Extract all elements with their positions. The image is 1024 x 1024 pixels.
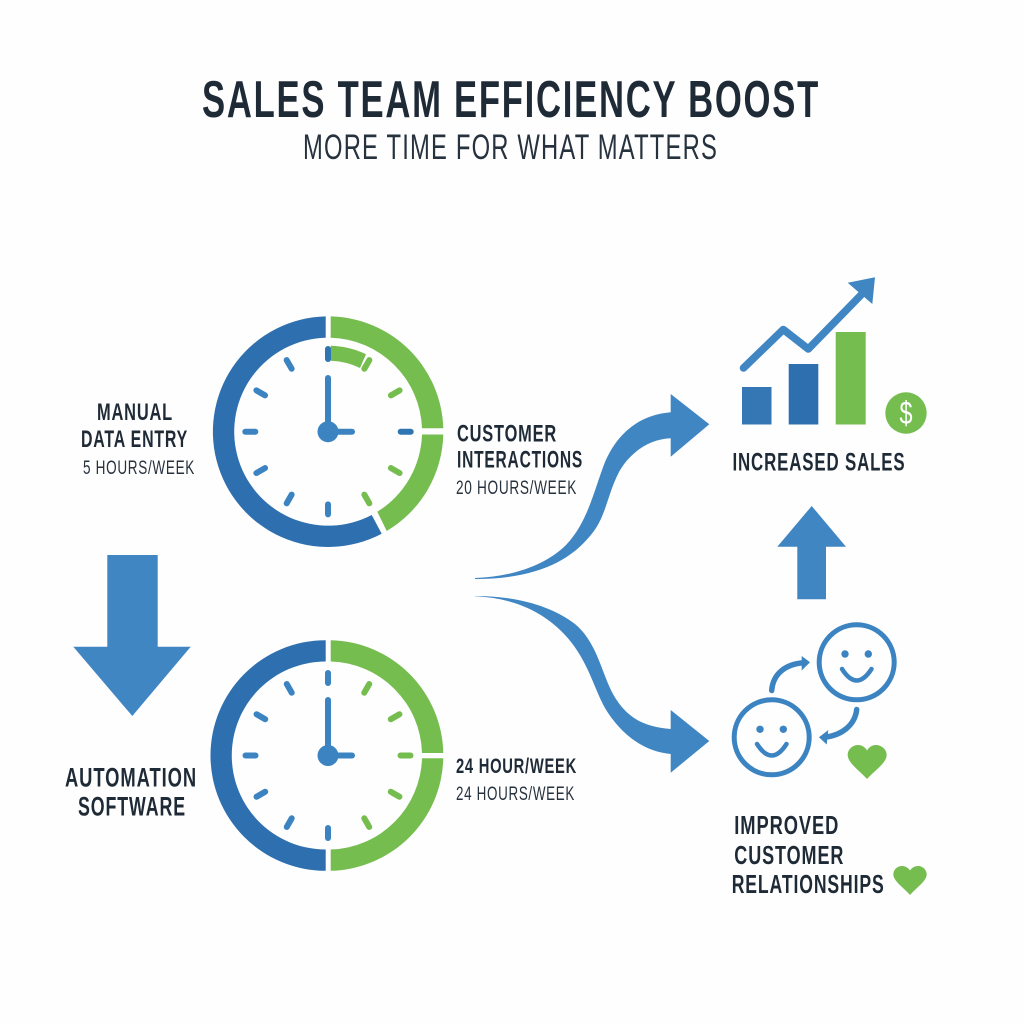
label: automation software: SOFTWARE [78,792,186,822]
arrow: up to increased sales [777,506,846,599]
label: improved customer relationships: IMPROVED [734,810,839,840]
ring: manual time segment [213,316,382,547]
clock hands [318,700,352,766]
icon: heart [848,745,887,779]
trend arrow [744,277,875,368]
label: manual data entry: DATA ENTRY [81,426,188,453]
label: customer interactions: 20 HOURS/WEEK [456,477,577,499]
ring: customer time segments [331,316,443,531]
icon: customer smileys [734,625,894,779]
arrow: smiley exchange up [772,656,810,690]
subtitle: MORE TIME FOR WHAT MATTERS [303,128,718,167]
clock ticks [245,349,411,514]
smiley: top right [819,625,894,700]
clock ticks [246,673,410,838]
label: customer interactions: CUSTOMER [457,420,557,448]
icon: dollar coin: $ [900,395,913,431]
bar chart [742,332,866,424]
label: increased sales: INCREASED SALES [732,448,906,476]
label: manual data entry [81,399,195,479]
label: 24 hours per week: 24 HOUR/WEEK [456,755,577,778]
ring: blue half [210,640,326,871]
label: customer interactions [456,420,583,499]
label: improved customer relationships: CUSTOMER [734,840,844,870]
arrow: down to automation [73,555,191,716]
label: customer interactions: INTERACTIONS [457,446,583,474]
label: automation software: AUTOMATION [65,762,197,792]
icon: sales growth chart [742,277,927,434]
clock hands [318,378,352,442]
icon: small heart [893,866,927,895]
label: 24 hours per week [456,755,577,805]
label: manual data entry: MANUAL [97,399,173,426]
label: automation software [65,762,197,822]
inner green arc [331,346,366,368]
arrow: smiley exchange down [819,710,857,744]
arrow: swoosh to customer relationships [475,596,709,773]
arrow: swoosh to increased sales [475,394,709,579]
clock: after automation [210,640,443,871]
smiley: bottom left [734,700,809,775]
label: manual data entry: 5 HOURS/WEEK [83,457,195,479]
label: improved customer relationships: RELATIONSHIPS [732,869,885,899]
ring: green half [331,640,443,871]
icon: dollar coin [885,392,927,434]
label: 24 hours per week: 24 HOURS/WEEK [456,783,575,805]
clock: before automation [213,316,443,547]
label: improved customer relationships [732,810,885,899]
